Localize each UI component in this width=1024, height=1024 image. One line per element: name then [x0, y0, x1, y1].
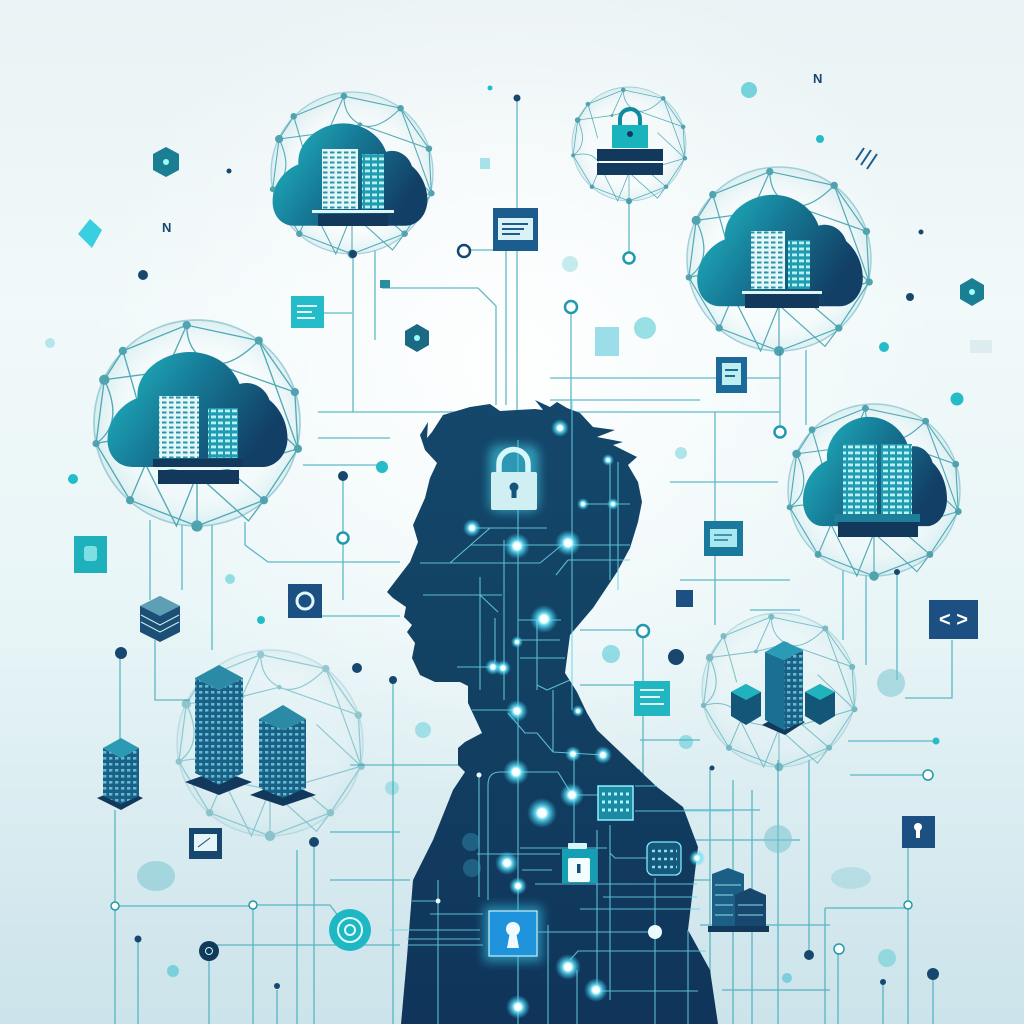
cloud bubble: right middle: [787, 404, 962, 581]
glowing keyhole panel: [484, 906, 542, 962]
small text glyph marks: [162, 71, 822, 235]
keypad chip: [647, 842, 681, 875]
scattered dots and nodes: [45, 82, 964, 989]
data grid chip: [598, 786, 633, 820]
card: lower mid teal: [634, 681, 670, 716]
glowing nodes: [436, 419, 705, 1019]
card: code: [929, 600, 978, 639]
cloud bubble: right: [686, 167, 873, 356]
building bubble: lower left: [176, 650, 365, 841]
card: light square: [595, 327, 619, 356]
card: code: < >: [939, 609, 968, 631]
neural circuit inside silhouette: [390, 400, 730, 1024]
cloud bubble: top left: [270, 92, 435, 258]
server cluster bottom right: [708, 868, 769, 932]
person silhouette: [387, 400, 730, 1024]
circuit lines: [115, 98, 952, 1024]
small text glyph marks: N: [813, 71, 822, 86]
diagonal stripes mark: [856, 148, 877, 169]
dark token: [199, 941, 219, 961]
faded globes: [137, 669, 905, 891]
small text glyph marks: N: [162, 220, 171, 235]
padlock icon: [489, 445, 539, 512]
server bubble: lower right: [701, 613, 858, 771]
card: keyhole right: [902, 816, 935, 848]
tower left: [97, 738, 143, 810]
card: circular icon: [288, 584, 322, 618]
card: mid right: [704, 521, 743, 556]
floating icon cards: [74, 158, 992, 859]
small lock: [562, 843, 597, 883]
cloud bubble: left: [92, 320, 302, 532]
card: top document: [493, 208, 538, 251]
lock bubble: top: [571, 87, 687, 204]
hexagon tokens: [78, 147, 984, 352]
card: left teal: [291, 296, 324, 328]
card: doc right: [716, 357, 747, 393]
card: monitor: [189, 828, 222, 859]
fingerprint token: [329, 909, 371, 951]
stacked server left: [140, 596, 180, 642]
card: left teal cylinder: [74, 536, 107, 573]
